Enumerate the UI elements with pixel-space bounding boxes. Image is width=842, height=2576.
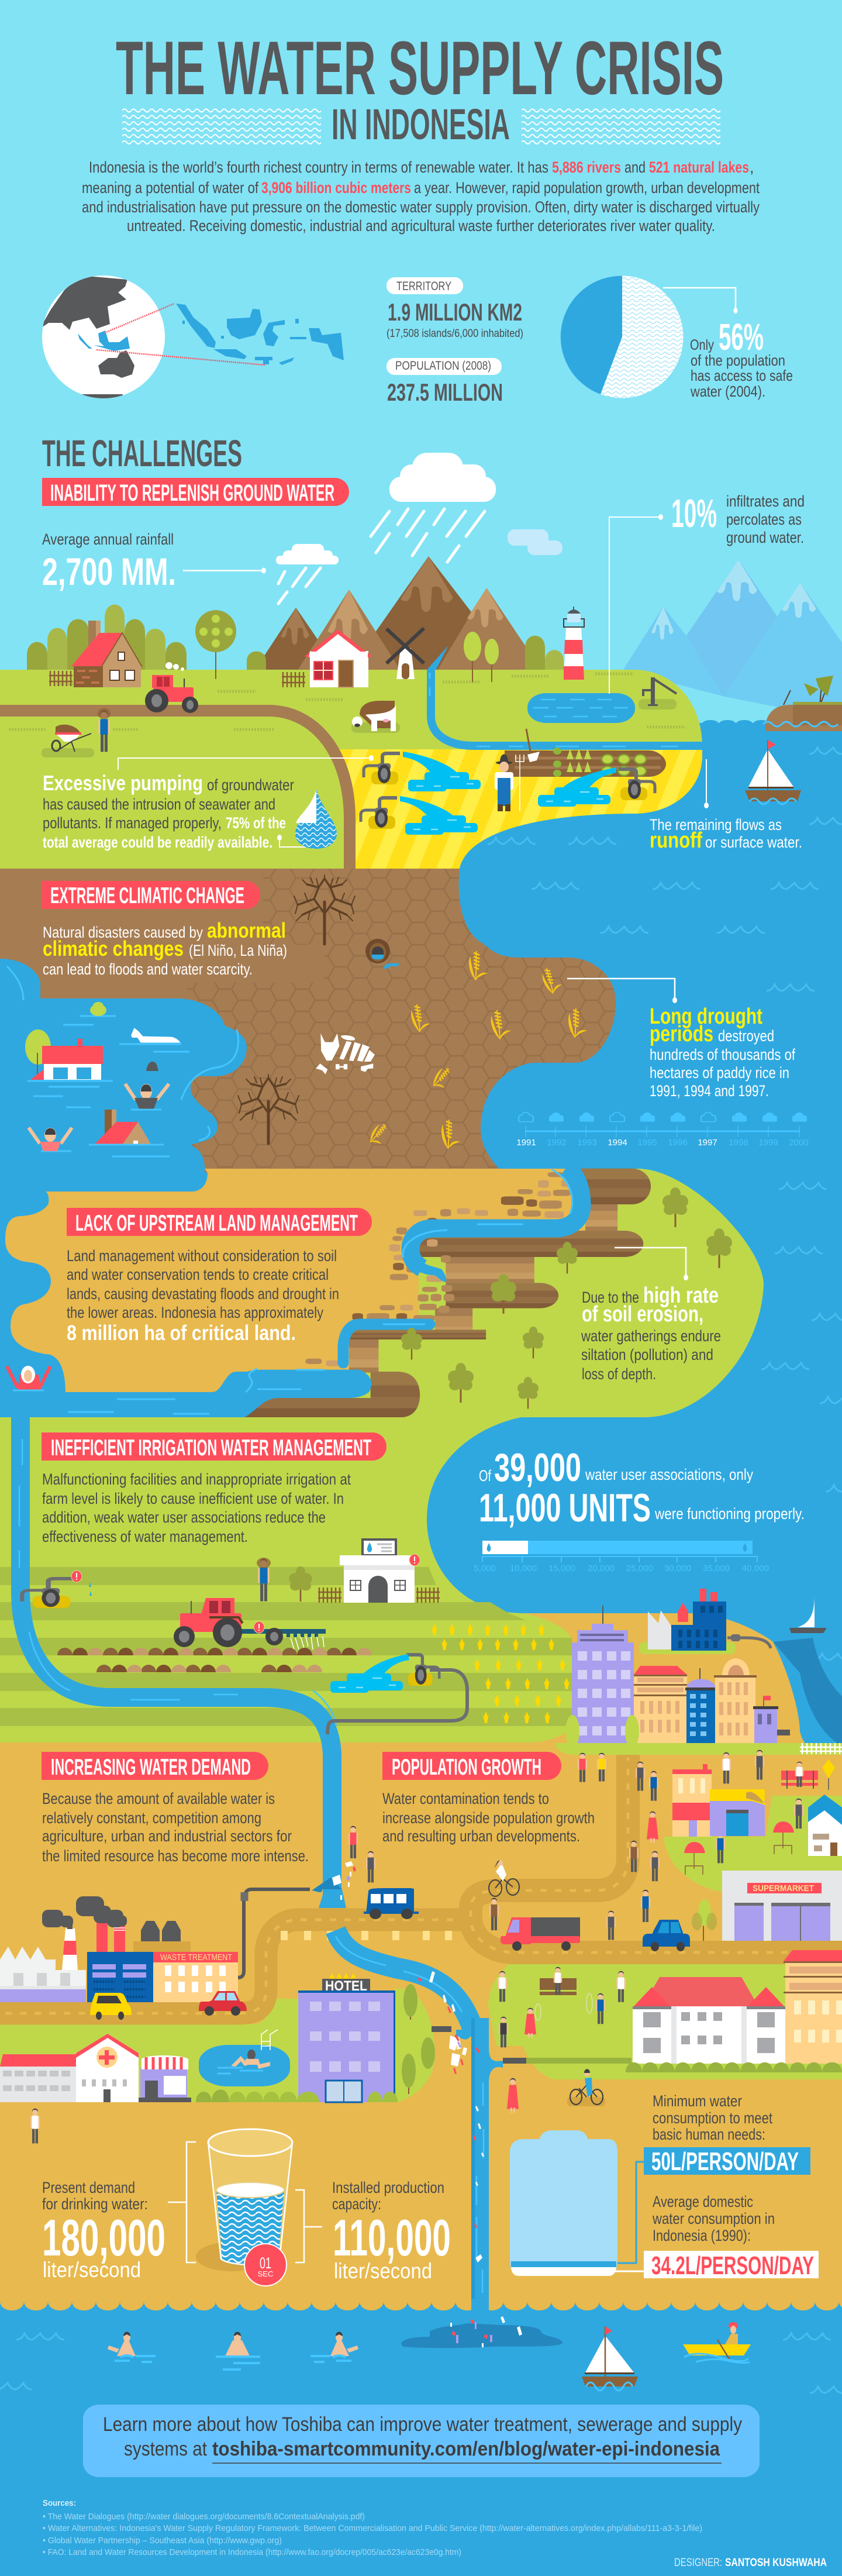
drought timeline 1991-2000 (516, 1113, 809, 1148)
withered wheat (366, 951, 587, 1149)
person in flood water (7, 1366, 50, 1390)
stat: territory: TERRITORY (396, 280, 451, 293)
infiltration stat: ground water. (726, 529, 804, 546)
litter at outlet (449, 2034, 467, 2074)
lighthouse backdrop trees and green farmland (0, 670, 702, 869)
text: minimum water consumption: Minimum water (653, 2092, 742, 2110)
white house with blue roof (808, 1795, 842, 1856)
text: land management: and water conservation tends to create critical (67, 1266, 329, 1283)
rower in yellow boat (683, 2322, 751, 2363)
stat: water user associations: Of (479, 1467, 491, 1485)
stat: drinking water demand: Present demand (42, 2179, 135, 2196)
yellow car (90, 1993, 132, 2020)
pie caption: water (2004). (690, 383, 765, 400)
callout: long drought: periods (650, 1022, 713, 1046)
cactus shaped tree (692, 1899, 717, 1941)
downtown buildings (634, 1658, 790, 1748)
stat: territory: (17,508 islands/6,000 inhabited) (387, 328, 523, 340)
sources: Sources: (43, 2498, 76, 2508)
outlet pipes (432, 2026, 632, 2064)
globe with Indonesia highlighted (40, 275, 265, 400)
drought timeline 1991-2000: 1993 (577, 1138, 597, 1148)
hotel: HOTEL (325, 1978, 367, 1994)
sources: • Water Alternatives: Indonesia's Water Supply Regulatory Framework: Between Commercialisation and Public Service (http://water-alternatives.org/index.php/allabs/111-a3-3-1/file) (43, 2523, 702, 2533)
call to action box (83, 2405, 760, 2477)
text: population growth: and resulting urban developments. (382, 1827, 580, 1845)
city skyline (639, 1589, 842, 1746)
shops (672, 1764, 765, 1837)
stat: territory: 1.9 MILLION KM2 (388, 298, 522, 326)
designer credit: DESIGNER: (674, 2557, 722, 2569)
dried well (365, 939, 400, 969)
tree line behind farmhouse (27, 605, 564, 670)
roads (0, 1755, 842, 2013)
pumps and pools (361, 752, 655, 835)
people around the city (30, 1750, 803, 2143)
blue bus (364, 1888, 419, 1919)
call to action box: Learn more about how Toshiba can improve water treatment, sewerage and supply (103, 2413, 742, 2436)
banner: extreme climatic change: EXTREME CLIMATIC CHANGE (50, 883, 244, 908)
sources: • Global Water Partnership – Southeast Asia (http://www.gwp.org) (43, 2536, 282, 2546)
text: climatic changes: can lead to floods and water scarcity. (43, 960, 253, 978)
text: climatic changes: climatic changes (43, 936, 184, 960)
intro paragraph: a year. However, rapid population growth, urban development (414, 179, 760, 197)
pollution slick (401, 2316, 563, 2348)
text: irrigation: effectiveness of water management. (42, 1528, 248, 1545)
pie caption: Only (690, 337, 714, 353)
cyclist on path (567, 2069, 605, 2106)
pond (527, 693, 635, 723)
callout line: 10% to pond (609, 514, 663, 694)
waste treatment plant (153, 1952, 238, 2002)
intro paragraph: Indonesia is the world’s fourth richest country in terms of renewable water. It has (89, 159, 548, 176)
text: average domestic consumption: Indonesia (1990): (653, 2227, 751, 2244)
farmer with shovel (495, 729, 540, 811)
text: population growth: Water contamination tends to (382, 1790, 549, 1807)
infiltration stat: percolates as (726, 511, 802, 528)
flood scene (7, 966, 238, 1156)
infiltration stat (671, 491, 805, 546)
fence (49, 671, 73, 686)
water bottle (510, 2130, 617, 2276)
river mouth (471, 2299, 489, 2312)
intro paragraph: 5,886 rivers (552, 159, 621, 176)
sailboat at sea (582, 2326, 638, 2391)
text: minimum water consumption: consumption to meet (653, 2109, 772, 2127)
text: population growth: increase alongside population growth (382, 1809, 595, 1827)
stat: territory (387, 277, 523, 340)
panel: excessive pumping text: has caused the intrusion of seawater and (43, 795, 275, 813)
ploughed furrows (57, 1648, 372, 1672)
pedestrian crossing (281, 1931, 452, 1940)
shark fin (146, 1062, 158, 1071)
rainfall label: Average annual rainfall (42, 531, 174, 548)
intro paragraph: , (750, 159, 754, 176)
hedge below mansion (626, 2062, 842, 2072)
text: increasing water demand: relatively constant, competition among (42, 1809, 261, 1827)
text: climatic changes: abnormal (207, 918, 286, 942)
river through farms (19, 1416, 336, 1895)
main river to the sea (456, 2018, 503, 2310)
text: soil erosion with callout: high rate (643, 1283, 719, 1308)
pie caption: 56% (719, 316, 764, 358)
hospital and shops (0, 2034, 191, 2102)
base of tower bushes (565, 1715, 639, 1748)
bar chart: functioning units: 15,000 (548, 1563, 575, 1573)
banner: extreme climatic change (42, 881, 260, 909)
callout: long drought: hectares of paddy rice in (650, 1064, 789, 1082)
hotel (298, 1973, 395, 2102)
bar chart: functioning units: 25,000 (626, 1563, 653, 1573)
dead trees (238, 875, 355, 1144)
hand water pump (639, 677, 677, 710)
lilac tower (572, 1606, 634, 1748)
blue car (643, 1920, 690, 1951)
dirt road (0, 711, 350, 869)
crop plot (505, 748, 666, 777)
water drop 75 percent (295, 790, 337, 849)
callout line: pumping (118, 755, 374, 847)
text: soil erosion with callout (581, 1248, 721, 1383)
stat: installed capacity: capacity: (332, 2195, 381, 2213)
city bench and badminton players (535, 1967, 592, 2020)
flooded house (25, 1029, 113, 1081)
worker with wheelbarrow (42, 708, 111, 757)
intro paragraph (82, 159, 760, 235)
banner: inability to replenish ground water (42, 478, 349, 506)
pump, pool and long pipe (327, 1654, 467, 1734)
silos and blue plant (87, 1921, 191, 2002)
bottle connectors (614, 2162, 644, 2271)
bar chart: functioning units: 40,000 (742, 1563, 769, 1573)
stat: water user associations: water user associations, only (585, 1466, 753, 1483)
text: minimum water consumption: basic human needs: (653, 2126, 765, 2143)
green island (351, 1169, 764, 1417)
white cottage (282, 629, 372, 687)
pie chart: 56% safe water (561, 275, 738, 398)
drought timeline 1991-2000: 1996 (668, 1138, 688, 1148)
stat: population: POPULATION (2008) (395, 359, 491, 373)
text: soil erosion with callout: siltation (pollution) and (581, 1346, 713, 1363)
callout: runoff: The remaining flows as (650, 816, 782, 834)
sea scallops (702, 720, 837, 728)
callout: long drought: Long drought (650, 1004, 762, 1029)
stat: water user associations: were functioning properly. (654, 1505, 805, 1523)
bar chart: functioning units: 35,000 (703, 1563, 730, 1573)
banner: lack of upstream land management: LACK OF UPSTREAM LAND MANAGEMENT (75, 1211, 358, 1236)
banner: population growth (382, 1752, 561, 1780)
debris by the river (332, 1861, 356, 1900)
callout: runoff: runoff (650, 828, 702, 853)
callout: runoff (650, 759, 802, 853)
intro paragraph: meaning a potential of water of (82, 179, 258, 197)
red car (199, 1991, 247, 2016)
irrigation office building (318, 1540, 440, 1603)
intro paragraph: 3,906 billion cubic meters (261, 179, 411, 197)
cyclist (489, 1860, 519, 1896)
city green lawns (0, 1796, 842, 2102)
pie caption: has access to safe (691, 367, 793, 384)
text: soil erosion with callout: loss of depth. (582, 1365, 656, 1383)
bar chart: functioning units: 30,000 (664, 1563, 691, 1573)
text: population growth (382, 1790, 595, 1845)
orange city land (0, 1613, 842, 2302)
windmill (387, 628, 424, 679)
green city base strip (555, 1743, 842, 1755)
white fence by the water (800, 1743, 842, 1754)
infiltration stat: infiltrates and (726, 493, 805, 510)
stat: installed capacity: liter/second (334, 2259, 432, 2283)
people in the flood (29, 1084, 169, 1151)
text: increasing water demand (42, 1790, 309, 1865)
sources (43, 2498, 702, 2557)
waste pipe into river (237, 1889, 310, 1978)
panel: excessive pumping text: Excessive pumping (43, 771, 203, 795)
text: land management: Land management without consideration to soil (67, 1247, 337, 1265)
drought timeline 1991-2000: 1997 (698, 1138, 717, 1148)
text: irrigation: Malfunctioning facilities and inappropriate irrigation at (42, 1470, 351, 1488)
pie caption (690, 316, 793, 400)
panel: excessive pumping text (43, 771, 294, 851)
factory smoke (42, 1896, 127, 1927)
stat: water user associations: 39,000 (494, 1445, 581, 1490)
rocks beside the river (306, 1172, 572, 1366)
sea wave marks (0, 748, 842, 2393)
sources: • The Water Dialogues (http://water dialogues.org/documents/8.6ContextualAnalysis.pdf) (43, 2512, 365, 2522)
cracked soil panel (0, 869, 629, 1176)
swimming horse (119, 1028, 181, 1044)
supermarket (722, 1871, 842, 1941)
swimming pool (199, 2030, 290, 2086)
supermarket: SUPERMARKET (753, 1883, 814, 1893)
intro paragraph: and (624, 159, 646, 176)
bar chart: functioning units: 20,000 (588, 1563, 615, 1573)
text: land management: 8 million ha of critical land. (67, 1321, 296, 1345)
drought timeline 1991-2000: 2000 (789, 1138, 809, 1148)
stat: drinking water demand: 180,000 (42, 2209, 165, 2267)
upland orange panel (5, 1169, 585, 1392)
text: minimum water consumption (644, 2092, 810, 2176)
drought timeline 1991-2000: 1998 (729, 1138, 748, 1148)
panel: excessive pumping text: of groundwater (207, 776, 294, 794)
stat: drinking water demand: liter/second (43, 2258, 141, 2282)
mansion and tan apartments (633, 1950, 842, 2064)
call to action box: systems at (124, 2438, 207, 2460)
text: irrigation (42, 1470, 351, 1545)
submerged house (89, 1110, 164, 1145)
callout: long drought: hundreds of thousands of (650, 1046, 795, 1063)
designer credit (674, 2557, 827, 2569)
stat: drinking water demand: for drinking water: (42, 2195, 148, 2213)
factory with smokestacks (0, 1916, 125, 2002)
olive trees on the hillside (401, 1187, 732, 1408)
green poplars near hotel (402, 1984, 435, 2094)
glass of water with brackets and timer: SEC (258, 2270, 273, 2278)
broken water pump (22, 1571, 92, 1608)
bar chart: functioning units (474, 1541, 769, 1573)
text: soil erosion with callout: of soil erosion, (582, 1302, 703, 1327)
yellow crop field (333, 749, 702, 869)
polluted river continuing through city (312, 1878, 475, 2036)
text: irrigation: farm level is likely to cause inefficient use of water. In (42, 1490, 344, 1507)
road lane markings (0, 1758, 788, 2013)
bar chart: functioning units: 10,000 (510, 1563, 537, 1573)
stat: population: 237.5 MILLION (387, 378, 503, 406)
callout: long drought: destroyed (718, 1027, 774, 1045)
river through farmland (430, 670, 702, 746)
text: climatic changes (43, 918, 287, 978)
large rain cloud (371, 453, 496, 562)
striped green farm panel (0, 1417, 572, 1742)
text: land management (67, 1247, 339, 1345)
banner: lack of upstream land management (67, 1208, 372, 1236)
intro paragraph: untreated. Receiving domestic, industrial and agricultural waste further deteriorates river water quality. (127, 217, 715, 235)
map of Indonesia (176, 304, 344, 365)
banner: inefficient irrigation water management (42, 1432, 387, 1461)
drought timeline 1991-2000: 1995 (637, 1138, 657, 1148)
callout: long drought: 1991, 1994 and 1997. (650, 1082, 769, 1100)
farmer on farm (257, 1558, 312, 1602)
lighthouse (564, 607, 584, 680)
heading: the challenges: THE CHALLENGES (42, 432, 242, 474)
drought timeline 1991-2000: 1994 (608, 1138, 627, 1148)
text: increasing water demand: agriculture, urban and industrial sectors for (42, 1827, 292, 1845)
infiltration stat: 10% (671, 491, 717, 536)
eroded soil strata (244, 1169, 651, 1417)
drought timeline 1991-2000: 1991 (516, 1138, 536, 1148)
stat: installed capacity: Installed production (332, 2179, 444, 2196)
banner: increasing water demand (42, 1752, 268, 1780)
light cloud (508, 529, 563, 555)
drought timeline 1991-2000: 1992 (547, 1138, 567, 1148)
text: soil erosion with callout: water gatherings endure (581, 1327, 721, 1345)
banner: inefficient irrigation water management: INEFFICIENT IRRIGATION WATER MANAGEMENT (51, 1435, 371, 1461)
text: climatic changes: (El Niño, La Niña) (189, 942, 287, 959)
small sailboat (789, 1597, 827, 1633)
rainfall label: 2,700 MM. (42, 550, 176, 593)
red tractor with plough (174, 1598, 326, 1649)
text: increasing water demand: Because the amount of available water is (42, 1790, 275, 1807)
panel: excessive pumping text: 75% of the (226, 814, 286, 832)
text: climatic changes: Natural disasters caused by (43, 924, 203, 941)
stat: drinking water demand (42, 2179, 165, 2282)
pale green trees (464, 632, 499, 682)
text: irrigation: addition, weak water user associations reduce the (42, 1509, 326, 1526)
stat: installed capacity: 110,000 (333, 2209, 451, 2267)
subtitle with wave bands: IN INDONESIA (332, 100, 510, 149)
pie caption: of the population (691, 352, 785, 369)
glass of water with brackets and timer: 01 (260, 2254, 271, 2272)
stat: water user associations: 11,000 UNITS (479, 1486, 651, 1530)
text: average domestic consumption: water consumption in (652, 2210, 775, 2227)
bar chart: functioning units: 5,000 (474, 1563, 496, 1573)
callout: long drought (567, 979, 795, 1100)
red tractor (145, 662, 198, 713)
text: average domestic consumption (644, 2193, 819, 2280)
sources: • FAO: Land and Water Resources Development in Indonesia (http://www.fao.org/docrep/005/ac623e/ac623e0g.htm) (43, 2547, 461, 2557)
subtitle with wave bands (122, 100, 720, 149)
glass of water with brackets and timer (168, 2129, 322, 2286)
text: land management: the lower areas. Indonesia has approximately (67, 1304, 323, 1321)
panel: excessive pumping text: total average could be readily available. (43, 834, 272, 851)
blue mountains (623, 560, 842, 720)
hedge rows (196, 2089, 398, 2102)
winding river (0, 1168, 582, 1417)
stat: installed capacity (332, 2179, 451, 2283)
stat: population (387, 358, 503, 406)
text: soil erosion with callout: Due to the (582, 1289, 639, 1306)
brown mountains (255, 556, 541, 670)
call to action box: toshiba-smartcommunity.com/en/blog/water-epi-indonesia (212, 2438, 720, 2460)
banner: inability to replenish ground water: INABILITY TO REPLENISH GROUND WATER (50, 480, 334, 506)
banner: population growth: POPULATION GROWTH (392, 1755, 541, 1780)
sailboat (745, 740, 801, 804)
cow (351, 701, 400, 733)
text: land management: lands, causing devastating floods and drought in (67, 1285, 339, 1303)
scalloped shoreline (0, 2302, 842, 2310)
animal skeleton (316, 1034, 375, 1075)
banner: increasing water demand: INCREASING WATER DEMAND (51, 1755, 251, 1780)
panel: excessive pumping text: pollutants. If managed properly, (43, 814, 222, 832)
drought timeline 1991-2000: 1999 (758, 1138, 778, 1148)
delivery truck (501, 1917, 580, 1951)
swimmers (108, 2332, 358, 2370)
yellow rice rows (431, 1624, 570, 1723)
farmhouse (71, 621, 142, 687)
round tree (195, 610, 236, 679)
rainfall label (42, 531, 266, 593)
small rain cloud (276, 544, 339, 604)
intro paragraph: 521 natural lakes (649, 159, 749, 176)
callout: runoff: or surface water. (705, 834, 802, 851)
benches and cafe tables (684, 1759, 835, 1875)
stat: water user associations (479, 1445, 805, 1530)
text: increasing water demand: the limited resource has become more intense. (42, 1847, 309, 1865)
text: average domestic consumption: Average domestic (653, 2193, 753, 2210)
island with palms (763, 676, 842, 731)
waste treatment plant: WASTE TREATMENT (160, 1952, 232, 1962)
